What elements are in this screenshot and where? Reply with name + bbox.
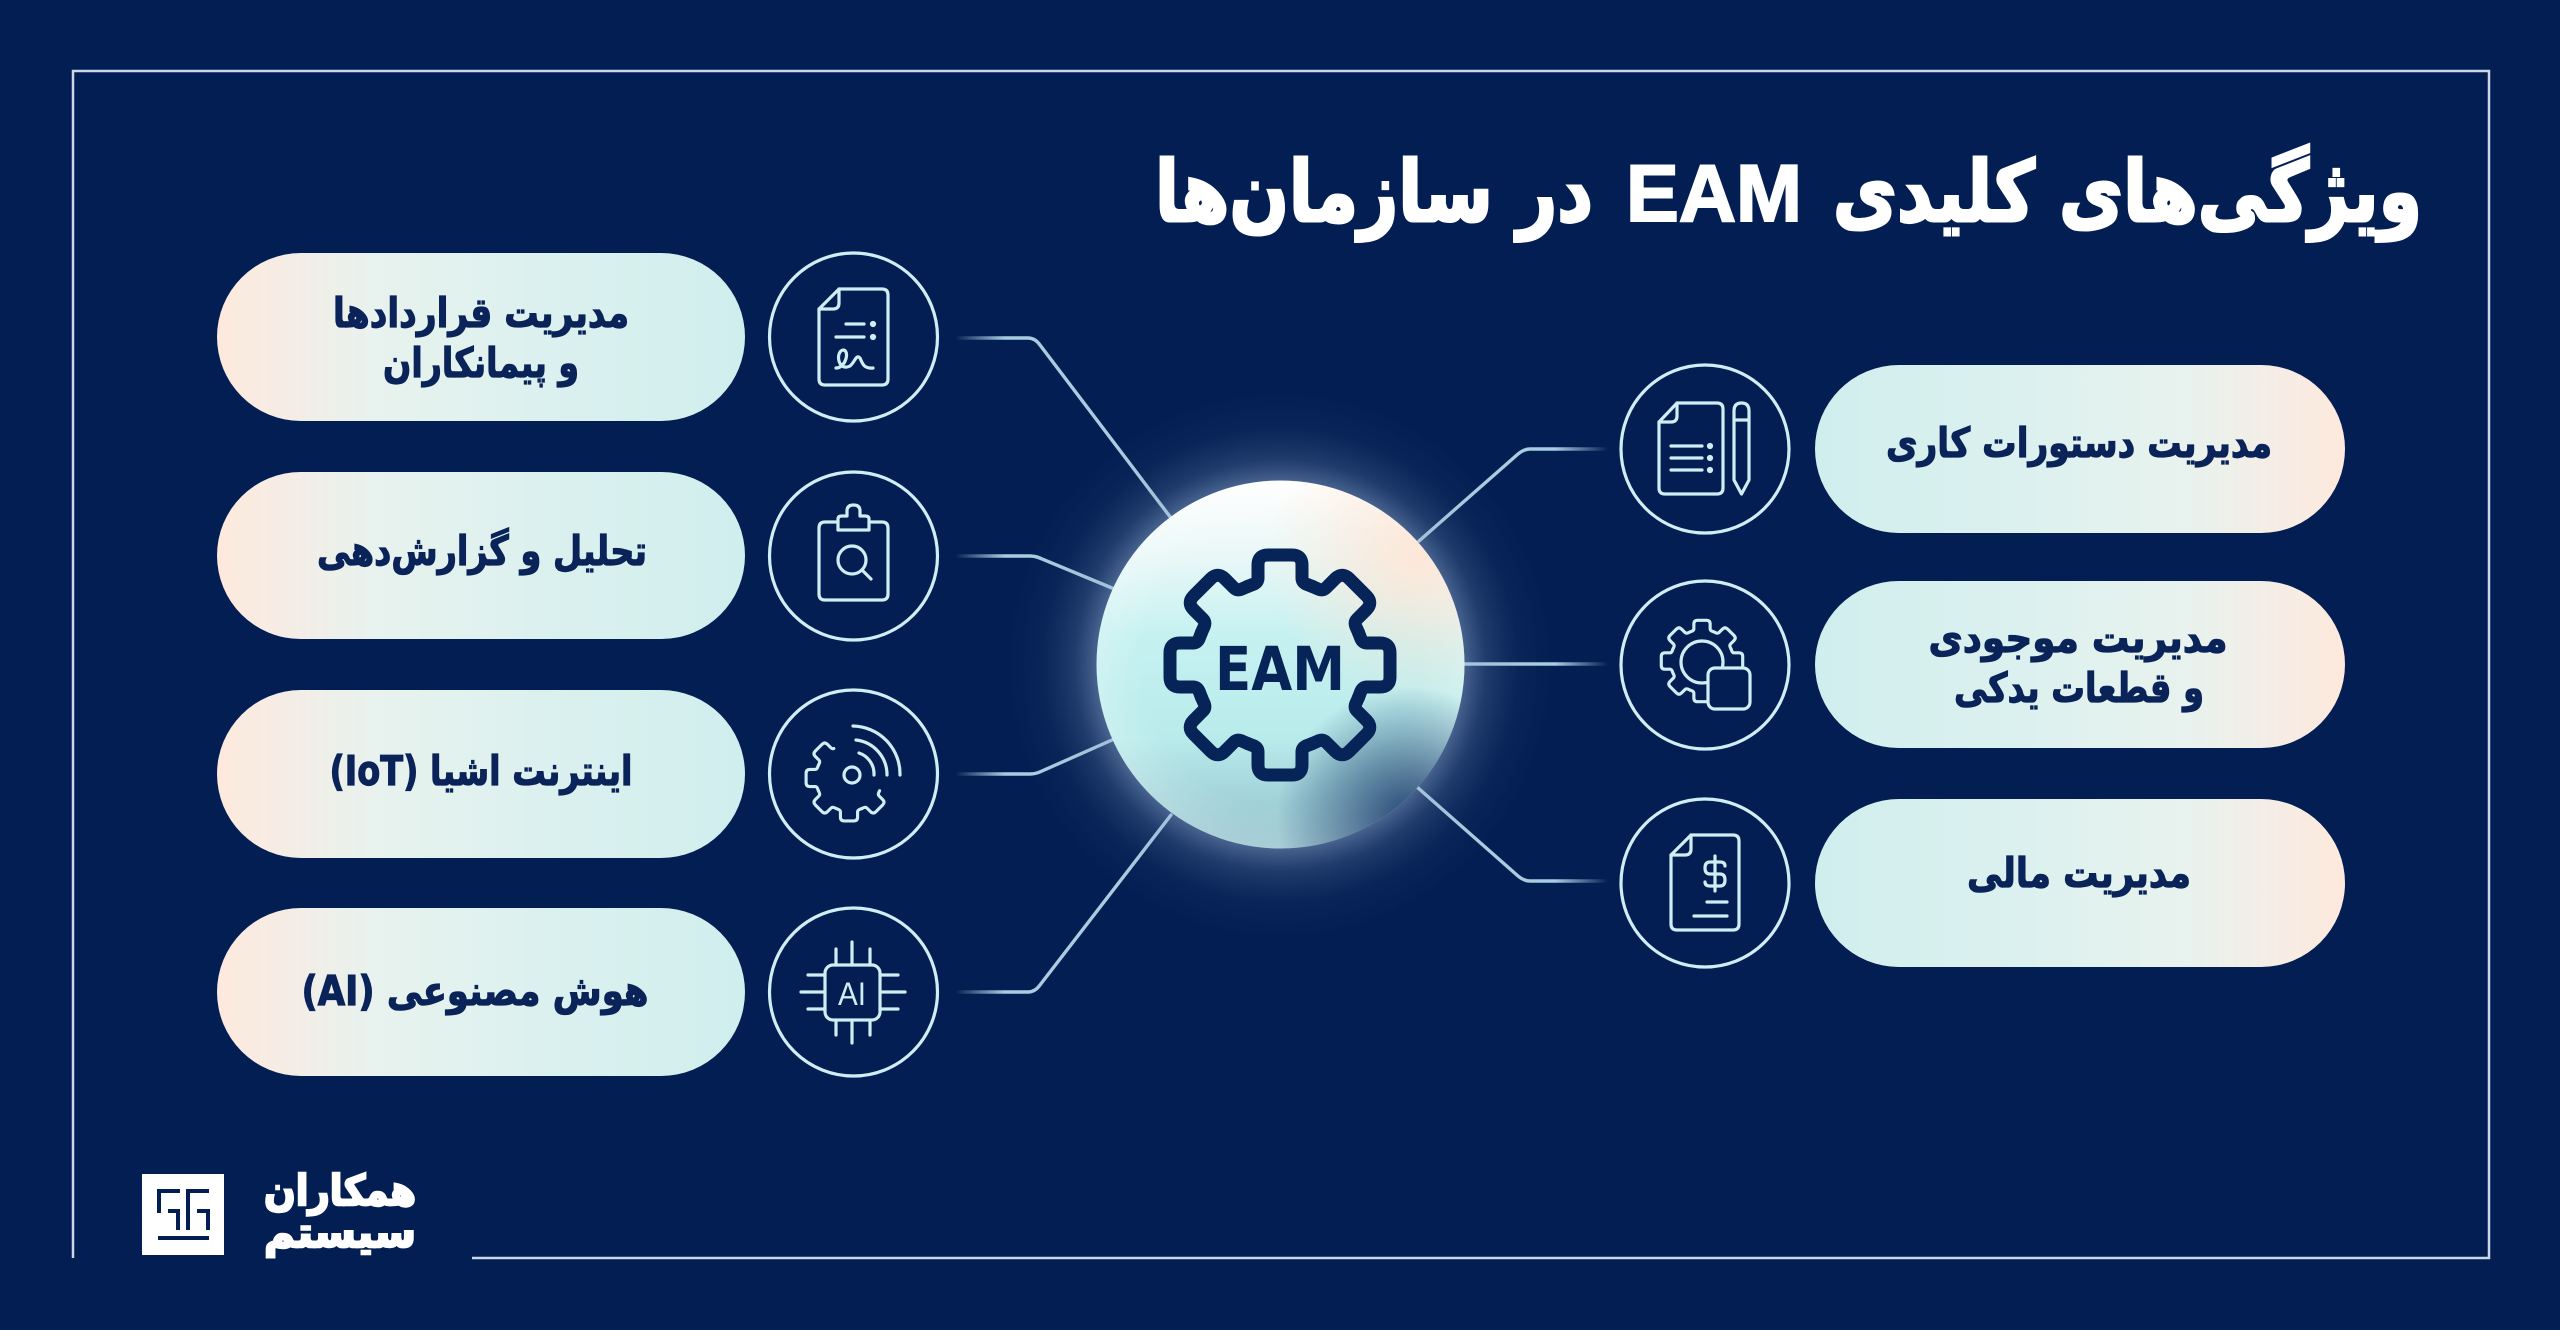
hub label: EAM [1215,634,1345,705]
logo [142,1166,416,1257]
logo wordmark [264,1166,416,1257]
icon: gear with signal [806,726,900,821]
label [333,289,629,388]
icon circle [770,690,938,858]
pill [217,472,745,639]
icon: document and pencil [1659,403,1749,494]
icon circle [1621,581,1789,749]
connector lines [955,338,1608,992]
item: analytics [217,472,938,640]
logo wordmark: همکاران [264,1166,416,1215]
icon circle [770,908,938,1076]
item: AI [217,908,938,1076]
icon: AI chip: AI [838,976,866,1012]
pill [1815,799,2345,967]
hub glow [1005,390,1555,940]
item: work orders [1621,365,2345,533]
label: تحلیل و گزارش‌دهی [317,527,647,576]
logo wordmark: سیستم [264,1208,416,1257]
pill [217,908,745,1076]
pill [217,690,745,858]
label: مدیریت دستورات کاری [1886,419,2272,467]
icon circle [770,472,938,640]
icon: invoice [1671,835,1739,930]
title: ویژگی‌های کلیدی [1833,143,2422,242]
central hub [1005,390,1555,940]
logo mark [142,1174,224,1255]
label: مدیریت مالی [1967,849,2191,897]
icon circle [1621,365,1789,533]
icon: AI chip [801,942,905,1043]
item: contracts [217,253,938,421]
icon: gear and box [1661,620,1750,709]
pill [1815,365,2345,533]
label: اینترنت اشیا (IoT) [330,747,632,795]
icon circle [770,253,938,421]
label: مدیریت قراردادها [333,289,629,337]
pill [1815,581,2345,748]
label [1928,614,2228,713]
icon: gear [1170,555,1390,775]
icon circle [1621,799,1789,967]
icon: signed document [819,289,888,385]
label: و پیمانکاران [383,339,579,388]
hub sphere [1096,480,1464,848]
icon: clipboard search [819,505,888,600]
label: و قطعات یدکی [1954,664,2204,713]
pill [217,253,745,421]
label: هوش مصنوعی (AI) [302,967,648,1015]
label: مدیریت موجودی [1928,614,2228,662]
title: در سازمان‌ها [1155,143,1593,242]
item: finance [1621,799,2345,967]
item: IoT [217,690,938,858]
title [1155,143,2422,242]
item: inventory [1621,581,2345,749]
title: EAM [1626,149,1802,239]
